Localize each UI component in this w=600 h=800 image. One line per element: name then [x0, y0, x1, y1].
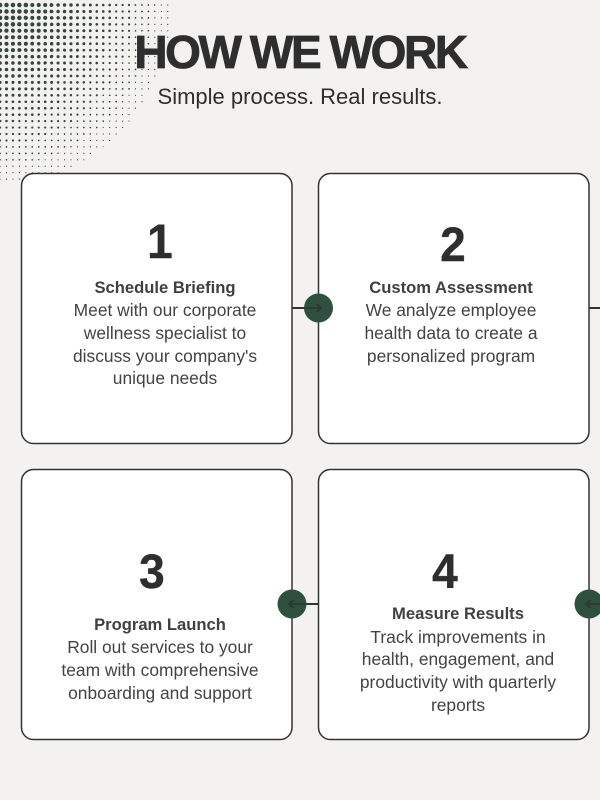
card 4 text — [360, 546, 556, 715]
card 1 text: wellness specialist to — [84, 323, 246, 343]
description 4 — [360, 627, 556, 715]
card 1 box — [22, 174, 292, 444]
arrow: step 4 to 3 — [278, 590, 318, 618]
subtitle: Simple process. Real results. — [158, 84, 442, 109]
heading: Custom Assessment: Custom Assessment — [369, 278, 533, 297]
card 3 text: team with comprehensive — [61, 660, 259, 680]
card 1 text: Meet with our corporate — [74, 300, 256, 320]
halftone dot decoration — [0, 2, 168, 180]
line: step 2 exit — [589, 307, 600, 309]
card 1 text: discuss your company's — [73, 346, 257, 366]
card 3 box — [22, 470, 292, 740]
card 3 text: onboarding and support — [68, 683, 252, 703]
card 4 text: reports — [431, 695, 485, 715]
heading: Program Launch: Program Launch — [94, 615, 226, 634]
arrow: step 4 entry — [574, 590, 600, 618]
card 4 box — [318, 470, 589, 740]
description 3 — [61, 637, 259, 703]
card 3 text — [61, 546, 259, 703]
card 4 text: Track improvements in — [370, 627, 546, 647]
arrow: step 1 to 2 — [292, 294, 333, 322]
card 1 text — [73, 216, 257, 388]
heading: Schedule Briefing: Schedule Briefing — [94, 278, 236, 297]
card 2 text: We analyze employee — [366, 300, 536, 320]
number 2: 2 — [440, 219, 466, 272]
number 3: 3 — [139, 546, 165, 599]
card 4 text: health, engagement, and — [362, 649, 554, 669]
number 4: 4 — [432, 546, 458, 599]
heading: Measure Results: Measure Results — [392, 604, 524, 623]
card 2 text: health data to create a — [364, 323, 538, 343]
card 3 text: Roll out services to your — [67, 637, 253, 657]
card 1 text: unique needs — [113, 368, 217, 388]
card 2 text — [364, 219, 538, 366]
card 2 text: personalized program — [367, 346, 535, 366]
card 4 text: productivity with quarterly — [360, 672, 556, 692]
description 1 — [73, 300, 257, 388]
title: HOW WE WORK — [134, 26, 466, 78]
description 2 — [364, 300, 538, 366]
card 2 box — [318, 174, 589, 444]
number 1: 1 — [147, 216, 173, 269]
